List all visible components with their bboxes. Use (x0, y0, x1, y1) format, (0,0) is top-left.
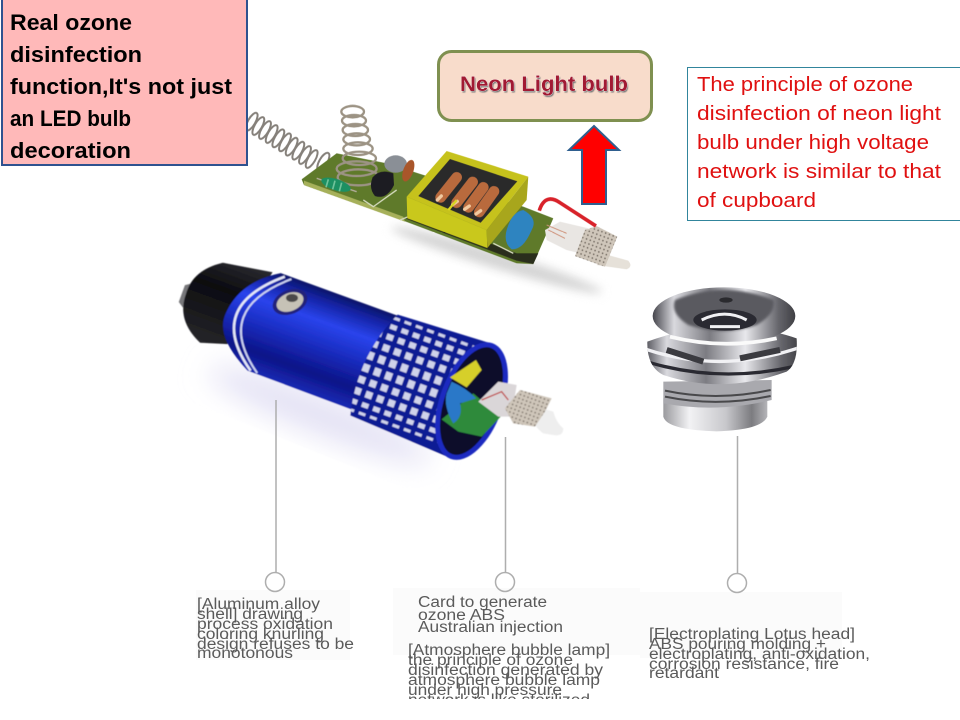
glass neon bulb with mesh (545, 222, 630, 269)
text box: principle of ozone disinfection: network is similar to that (697, 161, 941, 183)
small components (384, 155, 407, 173)
text box: principle of ozone disinfection: bulb under high voltage (697, 132, 929, 154)
caption: card to generate ozone: Card to generate (418, 594, 547, 611)
caption: electroplating lotus head: ABS pouring molding + (649, 636, 826, 653)
caption: electroplating lotus head: corrosion resistance, fire (649, 656, 839, 673)
caption: atmosphere bubble lamp: [Atmosphere bubble lamp] (408, 642, 610, 659)
caption: aluminum alloy shell: coloring knurling (197, 626, 324, 643)
title box: real ozone disinfection: function,It's not just (10, 74, 233, 99)
label box: neon light bulb: Neon Light bulb (461, 74, 629, 98)
caption: card to generate ozone: ozone ABS (418, 607, 505, 624)
long spring (243, 111, 332, 172)
caption: electroplating lotus head (649, 626, 870, 682)
illustration: blue aluminium ozone device (178, 262, 563, 468)
label box: neon light bulb: Neon Light bulb (460, 72, 628, 96)
upright spring (337, 106, 379, 185)
callout line and marker: lotus head (728, 436, 746, 592)
caption: aluminum alloy shell: [Aluminum alloy (197, 596, 320, 613)
caption: aluminum alloy shell: process oxidation (197, 616, 333, 633)
caption: electroplating lotus head: [Electroplating Lotus head] (649, 626, 855, 643)
illustration: electroplated lotus head (643, 287, 800, 431)
device internals (442, 360, 563, 437)
title box: real ozone disinfection: Real ozone (10, 10, 132, 35)
callout line and marker: aluminium shell (266, 400, 284, 592)
board (302, 153, 553, 264)
thread (663, 380, 772, 408)
lower base (663, 397, 767, 431)
callout line and marker: atmosphere bubble lamp (496, 437, 514, 592)
transformer (407, 151, 528, 248)
text box: principle of ozone disinfection: The principle of ozone (697, 74, 913, 96)
caption: aluminum alloy shell: monotonous (197, 645, 293, 662)
caption: atmosphere bubble lamp: under high pressure (408, 682, 562, 699)
caption: aluminum alloy shell: shell] drawing (197, 606, 303, 623)
caption: electroplating lotus head: electroplating, anti-oxidation, (649, 646, 870, 663)
device body (178, 262, 509, 461)
open end (424, 336, 519, 466)
arrow: up to neon label (569, 126, 619, 204)
caption: atmosphere bubble lamp (408, 644, 609, 699)
caption: aluminum alloy shell (197, 596, 354, 662)
caption: atmosphere bubble lamp: the principle of ozone (408, 652, 573, 669)
title box: real ozone disinfection: an LED bulb (10, 106, 131, 131)
text box: principle of ozone disinfection: disinfection of neon light (697, 103, 941, 125)
illustration: neon bulb circuit board (243, 106, 630, 300)
caption: aluminum alloy shell: design refuses to be (197, 636, 354, 653)
caption: atmosphere bubble lamp: network is like sterilized (408, 692, 590, 709)
caption: atmosphere bubble lamp: atmosphere bubble lamp (408, 672, 600, 689)
dome (653, 287, 795, 345)
label box: neon light bulb (438, 52, 652, 120)
caption: electroplating lotus head: retardant (649, 665, 720, 682)
text box: principle of ozone disinfection: of cupboard (697, 190, 816, 212)
knurled sleeve (350, 314, 488, 456)
blue capacitor (506, 210, 534, 249)
caption: atmosphere bubble lamp: disinfection generated by (408, 662, 603, 679)
text box: principle of ozone disinfection (688, 68, 960, 220)
metal button (269, 284, 311, 320)
device shadow (202, 353, 438, 477)
caption: card to generate ozone (418, 594, 563, 636)
title box: real ozone disinfection: disinfection (10, 42, 142, 67)
board shadow (389, 220, 604, 300)
title box: real ozone disinfection: decoration (10, 138, 131, 163)
red wire (539, 199, 596, 226)
faint panels behind captions (196, 588, 842, 660)
green resistor (317, 175, 357, 195)
flange (647, 334, 797, 384)
caption: card to generate ozone: Australian injection (418, 619, 563, 636)
title box: real ozone disinfection (2, 0, 247, 165)
